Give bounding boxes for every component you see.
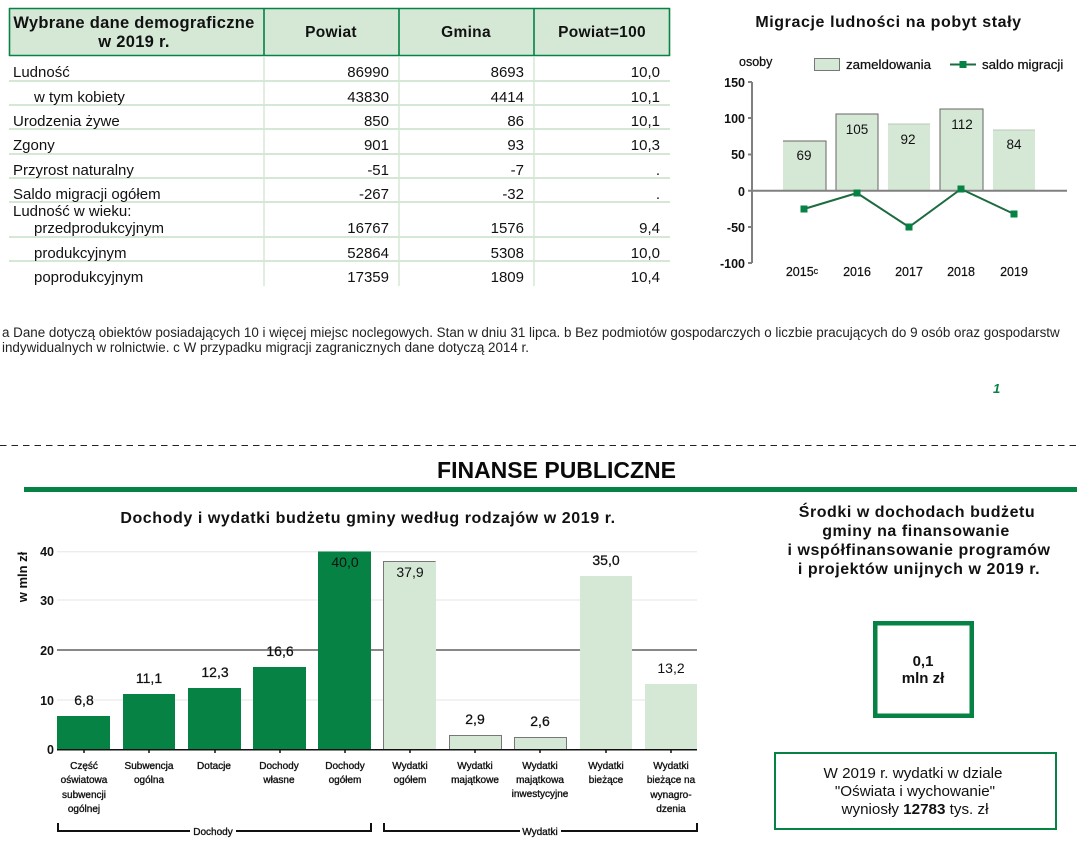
table row: Urodzenia żywe: Urodzenia żywe [13,113,120,130]
table row: Saldo migracji ogółem: Saldo migracji ogółem [13,186,161,203]
migration bar values [796,117,1022,163]
callout: education spending [775,753,1056,829]
table row: Zgony: 901 [364,137,389,154]
bracket: Wydatki: Wydatki [522,827,558,838]
migration bar values: 112 [951,117,973,132]
bar values: 13,2 [657,660,685,676]
green section rule [24,487,1077,492]
table row: Ludność: 10,0 [631,64,660,81]
table row: Przyrost naturalny: . [656,162,660,179]
category labels: subwencji [62,790,106,801]
EU funds heading [787,502,1051,578]
category labels: bieżące na [647,775,696,786]
expenditure bars [383,561,697,750]
footnotes: a Dane dotyczą obiektów posiadających 10 i więcej miejsc noclegowych. Stan w dniu 31 lipca. b Bez podmiotów gospodarczych o liczbie pracujących do 9 osób oraz gospodarstw [2,325,1060,340]
table header: w 2019 r. [97,33,170,51]
legend [814,57,1063,72]
table header: Powiat [305,24,357,41]
table row: Ludność w wieku: Ludność w wieku: [13,203,131,220]
panel: EU funds [775,502,1056,829]
year labels: 2015 [786,265,814,279]
callout: education spending: W 2019 r. wydatki w dziale [824,765,1002,782]
table row: poprodukcyjnym: 1809 [491,269,524,286]
category labels: bieżące [589,775,624,786]
table row: produkcyjnym: 10,0 [631,245,660,262]
table row: przedprodukcyjnym: 16767 [347,220,389,237]
year labels: c [814,266,819,276]
table row: produkcyjnym: 52864 [347,245,389,262]
migration axes: -50 [727,221,745,235]
table row: Zgony: Zgony [13,137,55,154]
callout: EU funds value: mln zł [902,670,945,687]
category labels: Dotacje [197,761,231,772]
table row: Saldo migracji ogółem: -267 [359,186,389,203]
panel: migration chart [720,14,1067,279]
table row: poprodukcyjnym: 10,4 [631,269,660,286]
page number: 1 [993,381,1000,396]
category labels: ogółem [329,775,361,786]
table row: w tym kobiety: 43830 [347,89,389,106]
table row: w tym kobiety [33,89,660,106]
category labels: oświatowa [61,775,108,786]
grid lines and y-axis labels: 30 [40,594,54,608]
table row: Ludność [13,64,660,81]
table row: Saldo migracji ogółem: -32 [502,186,524,203]
table row: w tym kobiety: w tym kobiety [33,89,125,106]
EU funds heading: gminy na finansowanie [822,523,1010,540]
category labels: Dochody [259,761,299,772]
category labels: inwestycyjne [512,789,569,800]
table: demographic data [9,8,670,286]
EU funds heading: Środki w dochodach budżetu [799,502,1035,521]
bar values: 6,8 [74,692,94,708]
category labels: dzenia [656,804,686,815]
table row: w tym kobiety: 4414 [491,89,524,106]
table row: Saldo migracji ogółem [13,186,660,203]
table row: przedprodukcyjnym [34,220,660,237]
bracket: Wydatki [384,823,697,838]
migration chart title: Migracje ludności na pobyt stały [755,14,1022,31]
bar values: 11,1 [136,670,162,686]
year labels: 2019 [1000,265,1028,279]
y-axis title: w mln zł [15,551,30,603]
category labels: majątkowa [516,775,564,786]
table row: Zgony: 93 [507,137,524,154]
category labels: ogólna [134,775,164,786]
legend: zameldowania [846,57,932,72]
table row: poprodukcyjnym: 17359 [347,269,389,286]
category labels: Subwencja [125,761,174,772]
callout: education spending: wyniosły 12783 tys. zł [841,801,989,818]
baseline and ticks [57,750,697,753]
migration bar values: 105 [846,122,868,137]
callout: EU funds value: 0,1 [913,653,933,670]
table header [9,8,670,56]
section heading: Finanse publiczne: FINANSE PUBLICZNE [437,457,676,483]
table header: Powiat=100 [558,24,646,41]
bar values: 37,9 [396,564,424,580]
bar values: 12,3 [201,664,229,680]
table row: produkcyjnym [34,245,660,262]
category labels: Wydatki [588,761,624,772]
legend: saldo migracji [982,57,1063,72]
migration axes: 0 [738,185,745,199]
callout: EU funds value [875,623,972,716]
budget chart title: Dochody i wydatki budżetu gminy według rodzajów w 2019 r. [120,510,616,527]
net migration line [800,186,1018,230]
footnotes: indywidualnych w rolnictwie. c W przypadku migracji zagranicznych dane dotyczą 2014 r. [2,340,529,355]
grid lines and y-axis labels: 0 [47,743,54,757]
bar values: 35,0 [592,552,620,568]
income bars [57,552,371,750]
migration axes: 50 [731,148,745,162]
callout: education spending: "Oświata i wychowanie" [835,783,995,800]
footnotes [2,325,1060,355]
table row: w tym kobiety: 10,1 [631,89,660,106]
table row: przedprodukcyjnym: przedprodukcyjnym [34,220,164,237]
category labels: Część [70,761,98,772]
table row: poprodukcyjnym: poprodukcyjnym [34,269,143,286]
bracket: Dochody: Dochody [193,827,233,838]
table header: Wybrane dane demograficzne [13,14,255,32]
year labels [786,265,1028,279]
table row: przedprodukcyjnym: 1576 [491,220,524,237]
year labels: 2017 [895,265,923,279]
category labels: Wydatki [457,761,493,772]
migration bars [783,109,1035,191]
table row: Zgony: 10,3 [631,137,660,154]
category labels: Wydatki [653,761,689,772]
table row: Urodzenia żywe [13,113,660,130]
migration axes: 100 [724,112,745,126]
grid lines and y-axis labels: 10 [40,694,54,708]
migration bar values: 84 [1006,137,1022,152]
bar values [74,552,685,729]
category labels: Wydatki [522,761,558,772]
year labels: 2016 [843,265,871,279]
bar values: 16,6 [266,643,294,659]
category labels: wynagro- [649,790,692,801]
table row: Saldo migracji ogółem: . [656,186,660,203]
table row: Urodzenia żywe: 86 [507,113,524,130]
table row: Ludność: Ludność [13,64,70,81]
grid lines and y-axis labels: 20 [40,644,54,658]
migration axes: 150 [724,76,745,90]
table row: przedprodukcyjnym: 9,4 [639,220,660,237]
table header: Gmina [441,24,491,41]
table row: Urodzenia żywe: 10,1 [631,113,660,130]
EU funds heading: i projektów unijnych w 2019 r. [798,561,1040,578]
category labels: ogółem [394,775,426,786]
table row: Urodzenia żywe: 850 [364,113,389,130]
bar values: 40,0 [331,554,359,570]
axis unit: osoby: osoby [739,55,773,69]
category labels: Dochody [325,761,365,772]
table row: Przyrost naturalny: Przyrost naturalny [13,162,134,179]
table row: produkcyjnym: 5308 [491,245,524,262]
table row: Zgony [13,137,660,154]
migration axes [720,76,1067,271]
panel: budget chart [15,510,697,838]
grid lines and y-axis labels [40,545,697,757]
year labels: 2018 [947,265,975,279]
table row: Przyrost naturalny [13,162,660,179]
category labels: własne [262,775,295,786]
EU funds heading: i współfinansowanie programów [787,542,1051,559]
table row: poprodukcyjnym [34,269,660,286]
migration bar values: 92 [900,132,916,147]
category labels: majątkowe [451,775,499,786]
table row: Przyrost naturalny: -7 [511,162,524,179]
migration axes: -100 [720,257,745,271]
table row: produkcyjnym: produkcyjnym [34,245,127,262]
grid lines and y-axis labels: 40 [40,545,54,559]
bar values: 2,9 [465,711,485,727]
table row: Ludność: 86990 [347,64,389,81]
category labels [61,761,696,815]
migration bar values: 69 [796,148,812,163]
table row: Ludność: 8693 [491,64,524,81]
category labels: Wydatki [392,761,428,772]
category labels: ogólnej [68,804,100,815]
bracket: Dochody [58,823,371,838]
table row: Przyrost naturalny: -51 [367,162,389,179]
bar values: 2,6 [530,713,550,729]
